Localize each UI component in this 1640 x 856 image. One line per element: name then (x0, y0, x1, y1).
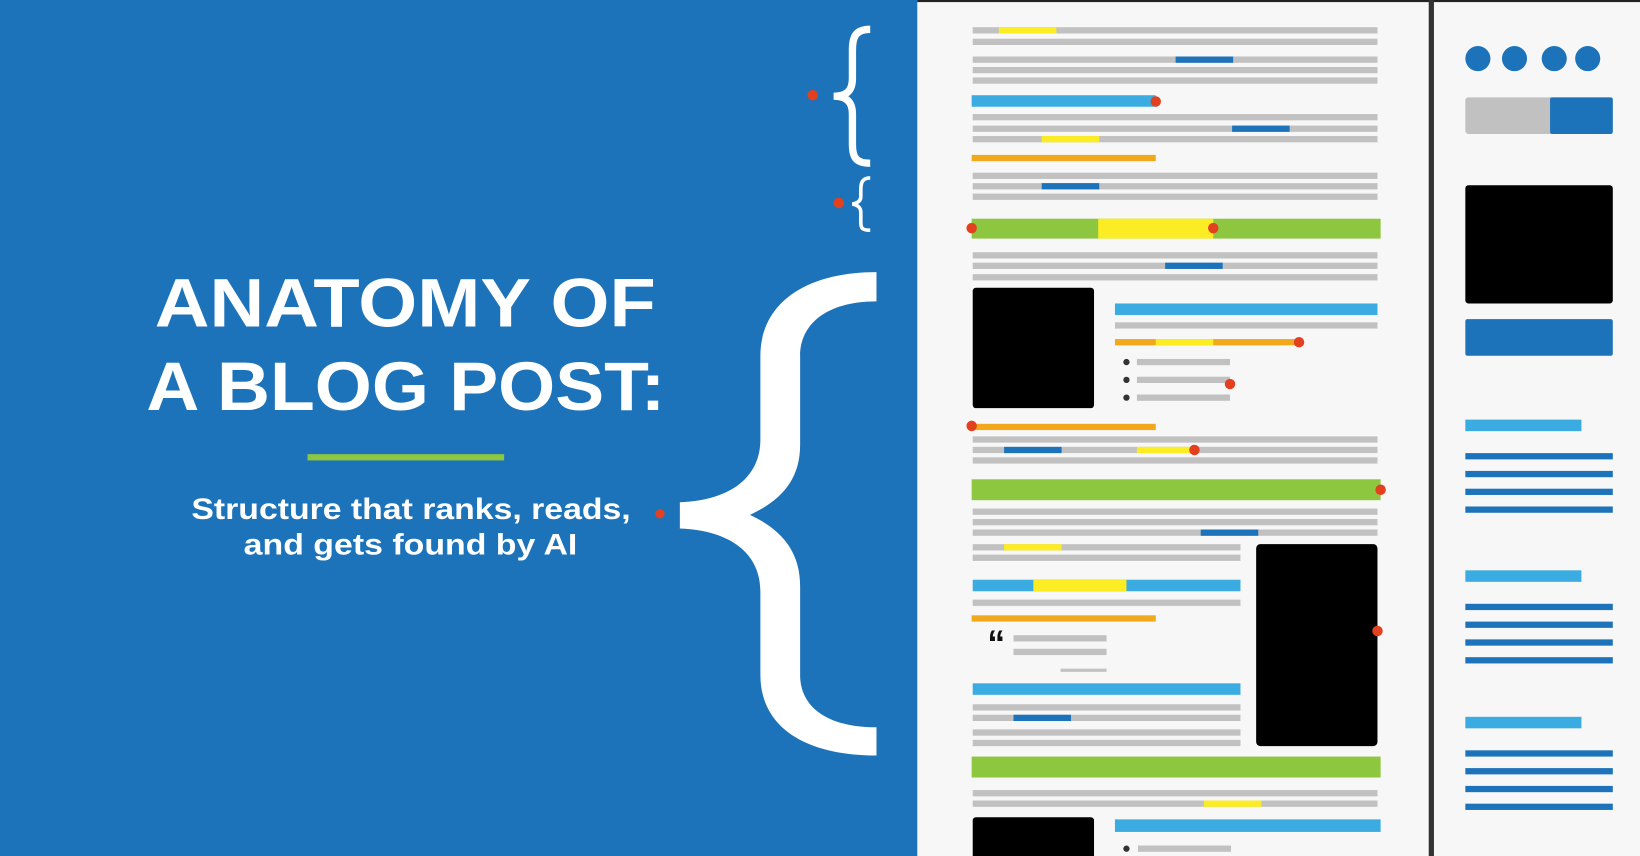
main column content (966, 27, 1386, 856)
icon: tiny brace (852, 178, 870, 230)
red dots left (655, 90, 844, 519)
title (146, 263, 665, 425)
subtitle (191, 493, 631, 562)
green underline (308, 454, 504, 460)
title: ANATOMY OF (155, 263, 656, 341)
sidebar (1465, 46, 1613, 810)
panel: blog page mockup (917, 0, 1640, 856)
icon: big brace (680, 272, 876, 756)
subtitle: Structure that ranks, reads, (191, 493, 631, 526)
icon: quote mark: “ (987, 623, 1005, 663)
icon: small brace top (834, 29, 870, 163)
title: A BLOG POST: (146, 347, 665, 425)
subtitle: and gets found by AI (244, 529, 577, 562)
